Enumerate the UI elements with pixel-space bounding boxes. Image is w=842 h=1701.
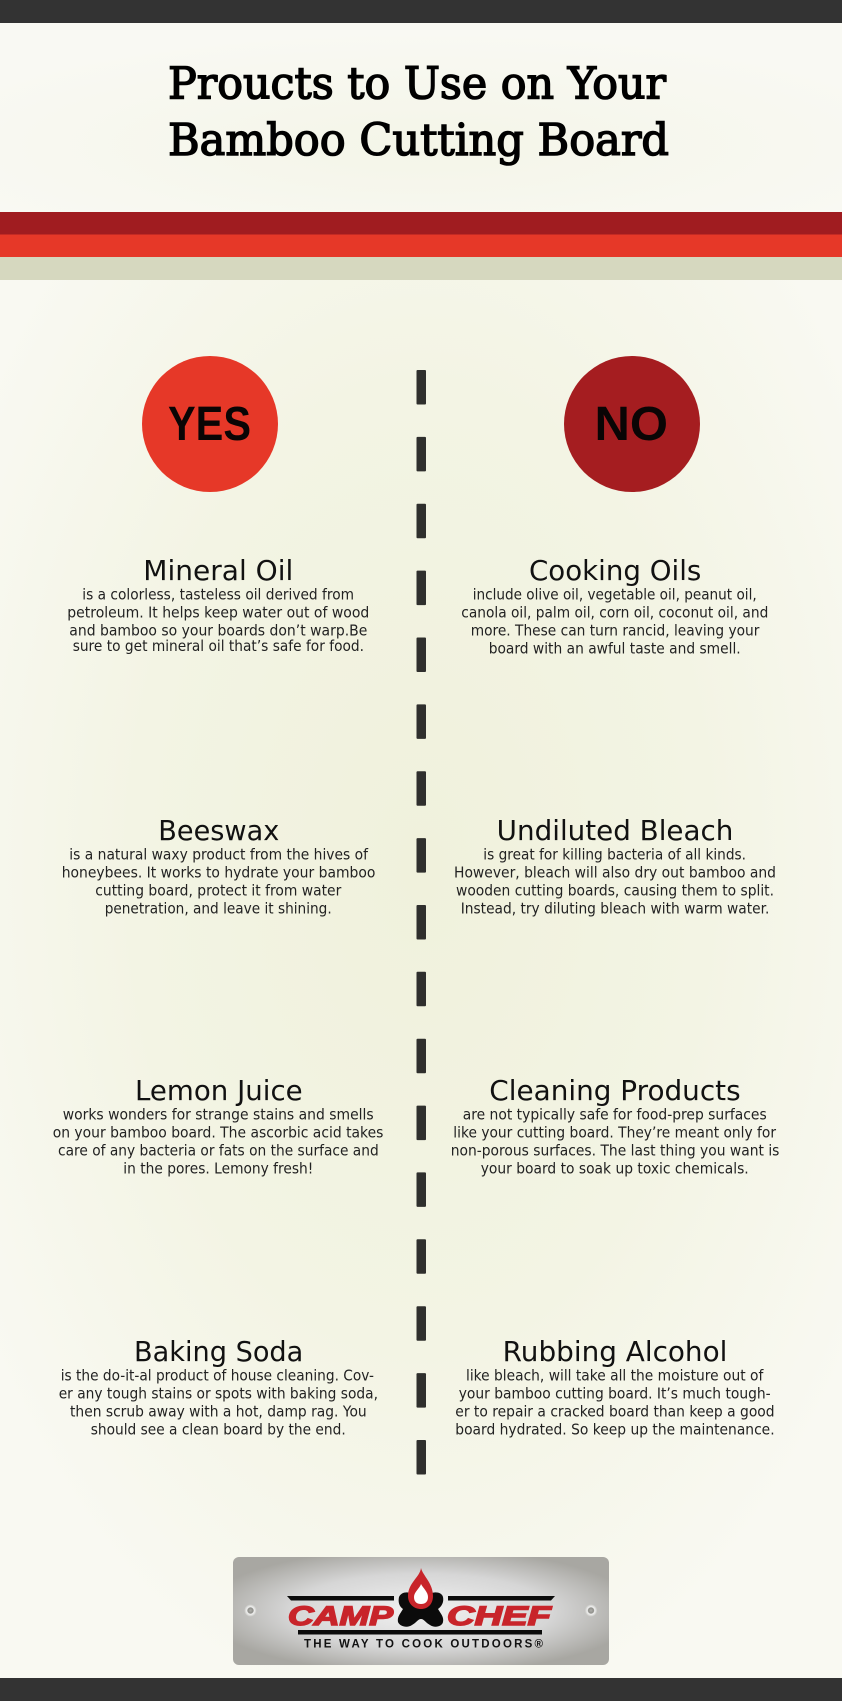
- text: beeswax description: cutting board, protect it from water: [95, 882, 342, 900]
- icon: right screw: [585, 1604, 597, 1616]
- tagline: THE WAY TO COOK OUTDOORS®: [304, 1638, 544, 1650]
- text: baking soda description: [59, 1366, 378, 1438]
- text: undiluted bleach description: However, bleach will also dry out bamboo and: [454, 864, 776, 882]
- text: lemon juice description: on your bamboo board. The ascorbic acid takes: [53, 1124, 384, 1142]
- yes badge: [142, 356, 278, 492]
- heading: cooking oils: Cooking Oils: [529, 555, 701, 587]
- text: cooking oils description: canola oil, palm oil, corn oil, coconut oil, and: [461, 604, 768, 622]
- text: undiluted bleach description: Instead, try diluting bleach with warm water.: [461, 900, 769, 918]
- top bar: [0, 0, 842, 23]
- panel: mineral oil: [67, 555, 369, 655]
- text: cooking oils description: board with an awful taste and smell.: [489, 640, 741, 658]
- title: Proucts to Use on Your: [168, 59, 667, 110]
- text: cleaning products description: your board to soak up toxic chemicals.: [481, 1160, 749, 1178]
- yes badge: YES: [168, 398, 251, 451]
- text: undiluted bleach description: [454, 846, 776, 918]
- text: rubbing alcohol description: er to repair a cracked board than keep a good: [455, 1402, 775, 1420]
- text: beeswax description: honeybees. It works to hydrate your bamboo: [62, 864, 375, 882]
- text: cleaning products description: [451, 1106, 780, 1178]
- text: cooking oils description: [461, 586, 768, 658]
- text: lemon juice description: in the pores. Lemony fresh!: [123, 1160, 313, 1178]
- heading: rubbing alcohol: Rubbing Alcohol: [503, 1336, 727, 1368]
- text: lemon juice description: [53, 1106, 384, 1178]
- text: mineral oil description: petroleum. It helps keep water out of wood: [67, 604, 369, 622]
- heading: mineral oil: Mineral Oil: [143, 555, 293, 587]
- text: cleaning products description: like your cutting board. They’re meant only for: [453, 1124, 777, 1142]
- panel: lemon juice: [53, 1075, 384, 1178]
- panel: cleaning products: [451, 1075, 780, 1178]
- icon: flame: [408, 1568, 433, 1609]
- heading: lemon juice: Lemon Juice: [135, 1075, 303, 1107]
- text: rubbing alcohol description: [455, 1366, 775, 1438]
- text: rubbing alcohol description: board hydrated. So keep up the maintenance.: [455, 1420, 775, 1438]
- no badge: [564, 356, 700, 492]
- panel: beeswax: [62, 815, 375, 918]
- text: cleaning products description: are not typically safe for food-prep surfaces: [463, 1106, 767, 1124]
- panel: cooking oils: [461, 555, 768, 658]
- wordmark: chef: CHEF: [447, 1601, 553, 1631]
- logo rules: [287, 1596, 555, 1634]
- text: mineral oil description: is a colorless, tasteless oil derived from: [82, 586, 354, 604]
- heading: cleaning products: Cleaning Products: [489, 1075, 741, 1107]
- text: beeswax description: penetration, and leave it shining.: [105, 900, 332, 918]
- panel: undiluted bleach: [454, 815, 776, 918]
- no badge: NO: [594, 398, 668, 451]
- text: baking soda description: is the do-it-al product of house cleaning. Cov-: [61, 1366, 374, 1384]
- title: [168, 59, 669, 166]
- wordmark: camp: CAMP: [288, 1601, 394, 1631]
- text: mineral oil description: sure to get mineral oil that’s safe for food.: [73, 637, 364, 655]
- heading: baking soda: Baking Soda: [134, 1336, 303, 1368]
- logo plate: camp chef: [233, 1557, 609, 1665]
- panel: rubbing alcohol: [455, 1336, 775, 1438]
- icon: crossed logs: [398, 1592, 443, 1627]
- header stripes: [0, 212, 842, 280]
- text: undiluted bleach description: is great for killing bacteria of all kinds.: [483, 846, 746, 864]
- text: beeswax description: [62, 846, 375, 918]
- heading: undiluted bleach: Undiluted Bleach: [497, 815, 733, 847]
- heading: beeswax: Beeswax: [158, 815, 279, 847]
- text: baking soda description: er any tough stains or spots with baking soda,: [59, 1384, 378, 1402]
- text: mineral oil description: [67, 586, 369, 655]
- text: lemon juice description: works wonders for strange stains and smells: [63, 1106, 374, 1124]
- panel: baking soda: [59, 1336, 378, 1438]
- text: rubbing alcohol description: like bleach, will take all the moisture out of: [466, 1366, 764, 1384]
- dashed center divider: [416, 370, 426, 1474]
- text: mineral oil description: and bamboo so your boards don’t warp.Be: [69, 622, 367, 640]
- text: cooking oils description: include olive oil, vegetable oil, peanut oil,: [473, 586, 757, 604]
- text: undiluted bleach description: wooden cutting boards, causing them to split.: [456, 882, 774, 900]
- text: beeswax description: is a natural waxy product from the hives of: [69, 846, 369, 864]
- text: baking soda description: then scrub away with a hot, damp rag. You: [70, 1402, 367, 1420]
- text: lemon juice description: care of any bacteria or fats on the surface and: [58, 1142, 379, 1160]
- icon: left screw: [244, 1604, 256, 1616]
- bottom bar: [0, 1678, 842, 1701]
- title: Bamboo Cutting Board: [168, 115, 669, 166]
- text: cleaning products description: non-porous surfaces. The last thing you want is: [451, 1142, 780, 1160]
- text: cooking oils description: more. These can turn rancid, leaving your: [471, 622, 760, 640]
- text: baking soda description: should see a clean board by the end.: [91, 1420, 346, 1438]
- text: rubbing alcohol description: your bamboo cutting board. It’s much tough-: [459, 1384, 771, 1402]
